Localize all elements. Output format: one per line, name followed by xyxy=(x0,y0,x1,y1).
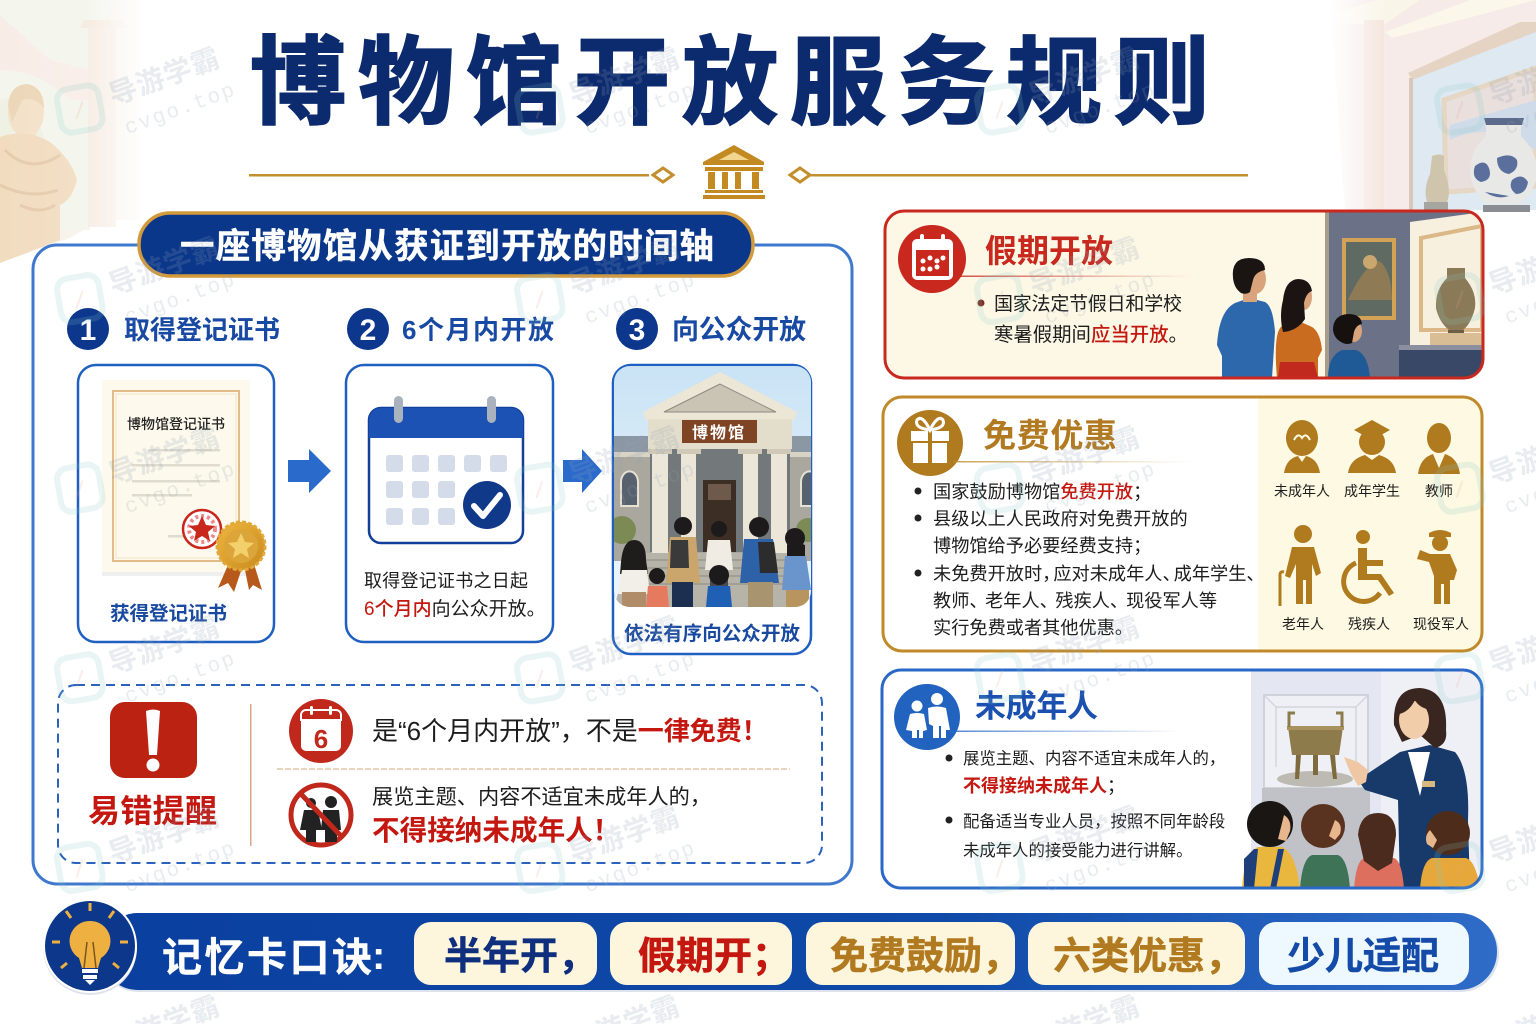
text: mistake 2: 不得接纳未成年人！ xyxy=(372,815,620,846)
visitors xyxy=(618,517,811,607)
panel: minors: 未成年人 xyxy=(975,689,1098,724)
step 2 heading: 2 xyxy=(360,314,376,347)
illustration: family in gallery xyxy=(1217,211,1485,378)
icon: elderly: 老年人 xyxy=(1282,616,1324,632)
panel: timeline xyxy=(33,213,852,884)
icon: wheelchair xyxy=(1344,530,1394,632)
step 3 heading: 向公众开放 xyxy=(672,315,806,345)
callout: common mistakes: 易错提醒 xyxy=(88,793,217,829)
icon: calendar six: 6 xyxy=(314,724,328,754)
text: mistake 1: 是“6个月内开放”，不是一律免费！ xyxy=(372,716,768,746)
icon: calendar xyxy=(369,396,523,543)
icon: alert xyxy=(110,702,197,778)
icon: light bulb xyxy=(43,899,137,995)
icon: gift xyxy=(897,410,963,476)
divider with temple icon xyxy=(249,145,1248,199)
card: open to public xyxy=(608,365,820,654)
background: museum display case right xyxy=(1328,0,1536,212)
icon: elderly xyxy=(1280,525,1324,632)
text: holiday rule xyxy=(994,293,1188,346)
step 1 heading: 取得登记证书 xyxy=(124,315,280,345)
memory bar label: 记忆卡口诀 xyxy=(162,936,374,980)
background: museum interior left xyxy=(0,0,145,265)
step 3 heading xyxy=(616,308,806,350)
icon: wheelchair: 残疾人 xyxy=(1348,616,1390,632)
panel: free and discounts xyxy=(883,397,1482,651)
icon: no minors xyxy=(291,785,351,845)
card: certificate xyxy=(78,365,274,642)
callout: common mistakes xyxy=(58,685,822,863)
text: card description: 取得登记证书之日起 xyxy=(364,571,528,591)
memory bar label: : xyxy=(372,934,385,978)
text: minors rules xyxy=(946,750,1225,860)
step 1 heading: 1 xyxy=(80,314,96,347)
text: free and discount rules xyxy=(914,482,1265,638)
icon: teacher xyxy=(1418,423,1460,499)
illustration: museum with visitors: 博物馆 xyxy=(692,423,746,442)
panel: free and discounts: 免费优惠 xyxy=(983,417,1117,454)
step 2 heading xyxy=(347,308,554,350)
text: minors rules: 展览主题、内容不适宜未成年人的， xyxy=(963,750,1225,768)
panel: holiday opening xyxy=(885,211,1485,378)
chip: six groups: 六类优惠， xyxy=(1053,936,1243,978)
chip: free: 免费鼓励， xyxy=(830,936,1020,978)
icon: adult and child xyxy=(894,684,960,750)
step 2 heading: 6个月内开放 xyxy=(402,315,554,345)
card: certificate: 获得登记证书 xyxy=(110,603,227,625)
icon: minor xyxy=(1274,420,1330,499)
children xyxy=(1242,847,1300,889)
text: mistake 2 xyxy=(372,785,711,846)
text: holiday rule: 国家法定节假日和学校 xyxy=(994,293,1182,315)
icon: certificate xyxy=(102,380,265,592)
chip: free xyxy=(806,922,1020,985)
illustration: museum with visitors xyxy=(608,366,820,607)
icon: calendar six xyxy=(289,699,353,763)
timeline heading pill: 一座博物馆从获证到开放的时间轴 xyxy=(180,228,714,266)
card: six months xyxy=(346,365,553,642)
chip: children: 少儿适配 xyxy=(1287,936,1439,978)
text: free and discount rules: 实行免费或者其他优惠。 xyxy=(933,618,1133,638)
text: mistake 2: 展览主题、内容不适宜未成年人的， xyxy=(372,785,711,809)
statue xyxy=(0,84,77,263)
chip: six groups xyxy=(1028,922,1245,985)
text: free and discount rules: 教师、老年人、残疾人、现役军人等 xyxy=(933,591,1217,611)
chip: children xyxy=(1259,922,1469,985)
card: six months: 6个月内向公众开放。 xyxy=(364,598,546,620)
text: free and discount rules: 博物馆给予必要经费支持； xyxy=(933,536,1151,556)
text: free and discount rules: 国家鼓励博物馆免费开放； xyxy=(933,482,1151,502)
icon: holiday calendar xyxy=(898,225,966,293)
card: open to public: 依法有序向公众开放 xyxy=(624,622,800,645)
illustration: guide with children xyxy=(1242,671,1483,889)
text: holiday rule: 寒暑假期间应当开放。 xyxy=(994,324,1188,346)
icon: veteran: 现役军人 xyxy=(1413,616,1469,632)
text: minors rules: 不得接纳未成年人； xyxy=(963,775,1125,796)
arrow xyxy=(288,449,331,493)
arrow xyxy=(563,449,602,493)
icon: certificate: 博物馆登记证书 xyxy=(127,416,225,432)
icon: adult student: 成年学生 xyxy=(1344,483,1400,499)
icon: veteran xyxy=(1413,530,1469,632)
title: 博物馆开放服务规则 xyxy=(250,5,1210,144)
text: minors rules: 配备适当专业人员，按照不同年龄段 xyxy=(963,813,1225,831)
text: free and discount rules: 未免费开放时，应对未成年人、成年学生、 xyxy=(933,564,1265,584)
step 1 heading xyxy=(67,308,280,350)
chip: holiday xyxy=(610,922,792,985)
icon: adult student xyxy=(1344,420,1400,499)
chip: half year xyxy=(414,922,597,985)
chip: holiday: 假期开； xyxy=(638,936,790,978)
timeline heading pill xyxy=(139,213,753,276)
family xyxy=(1217,258,1370,378)
icon: teacher: 教师 xyxy=(1425,483,1453,499)
text: free and discount rules: 县级以上人民政府对免费开放的 xyxy=(933,509,1188,529)
memory bar xyxy=(43,899,1499,995)
guide xyxy=(1358,745,1470,889)
panel: minors xyxy=(882,670,1483,889)
panel: holiday opening: 假期开放 xyxy=(985,233,1113,269)
step 3 heading: 3 xyxy=(629,314,645,347)
icon: minor: 未成年人 xyxy=(1274,483,1330,499)
chip: half year: 半年开， xyxy=(444,936,596,978)
text: minors rules: 未成年人的接受能力进行讲解。 xyxy=(963,842,1192,860)
